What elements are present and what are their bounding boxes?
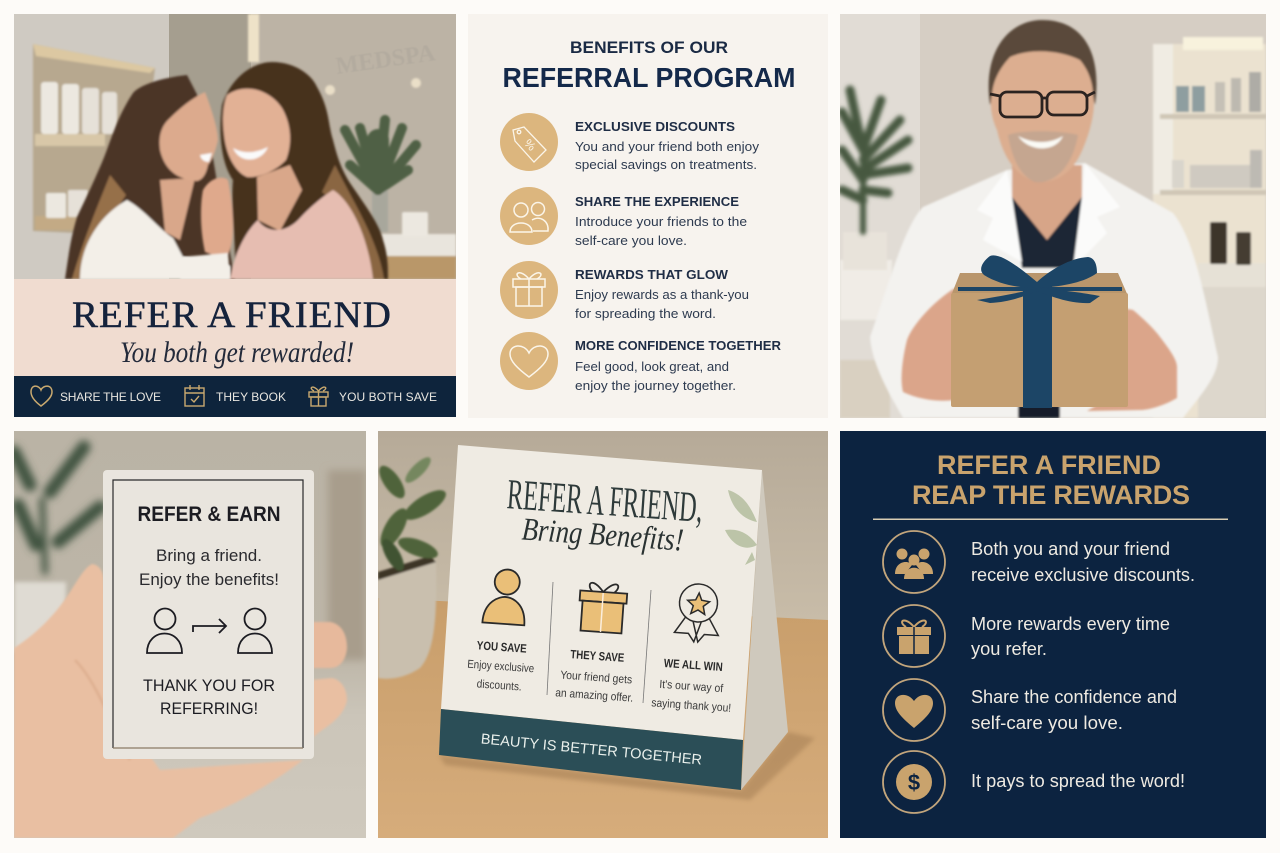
card subtext: Bring a friend.: [156, 547, 262, 565]
label: share the love: SHARE THE LOVE: [60, 390, 161, 404]
tagline: you both get rewarded: You both get rewarded!: [120, 336, 354, 369]
panel: doctor holding gift box photo: [840, 14, 1266, 418]
inner border: [113, 480, 303, 748]
benefit: more confidence together: [500, 332, 782, 393]
benefit: share the experience: self-care you love.: [575, 233, 687, 248]
benefit row: share confidence: [883, 679, 1177, 741]
divider: [547, 582, 553, 695]
icon: two people: [500, 187, 558, 245]
benefit row: share confidence: self-care you love.: [971, 713, 1123, 733]
panel: tabletop tent card photo: [375, 431, 828, 838]
face: [991, 51, 1094, 182]
benefit row: spread the word: [883, 751, 1185, 813]
column: they save: [555, 647, 634, 705]
label: they book: THEY BOOK: [216, 390, 286, 404]
glasses: [990, 92, 1095, 117]
heading: refer a friend: REFER A FRIEND: [72, 294, 392, 335]
column: we all win: It's our way of: [659, 679, 724, 695]
photo: two women smiling in medspa: [14, 14, 456, 279]
benefit: rewards that glow: [500, 261, 749, 321]
benefit: share the experience: [500, 187, 747, 248]
table: [378, 598, 828, 838]
icon: gift box: [578, 582, 628, 634]
benefit: share the experience: SHARE THE EXPERIENCE: [575, 194, 739, 209]
benefit: share the experience: Introduce your friends to the: [575, 214, 747, 229]
lapels: [977, 170, 1022, 262]
panel: benefits of our referral program: [468, 14, 828, 418]
scrubs: [1012, 197, 1082, 268]
icon: heart: [31, 386, 52, 406]
icon: gift: [500, 261, 558, 319]
label: you both save: YOU BOTH SAVE: [339, 390, 437, 404]
plant pot: [375, 454, 450, 679]
icon: award ribbon: [674, 583, 722, 643]
tent card front: [439, 445, 762, 790]
icon: person: [482, 568, 528, 625]
icon: price tag: [500, 113, 558, 171]
bow: [977, 255, 1100, 303]
icon: person arrow person: [147, 608, 272, 653]
heading line one: REFER A FRIEND: [937, 450, 1161, 480]
benefit row: discounts: receive exclusive discounts.: [971, 565, 1195, 585]
benefit: rewards that glow: for spreading the word.: [575, 306, 716, 321]
icon: group: [883, 531, 945, 593]
gift box: [951, 255, 1128, 408]
heading line two: REAP THE REWARDS: [912, 480, 1190, 510]
benefit: rewards that glow: Enjoy rewards as a thank-you: [575, 287, 749, 302]
tent card side flap: [741, 470, 788, 790]
heading: benefits of our: BENEFITS OF OUR: [570, 39, 728, 57]
column: they save: Your friend gets: [560, 670, 633, 687]
card shadow: [439, 732, 815, 800]
leaf decoration: [725, 490, 757, 565]
column: we all win: [651, 656, 732, 715]
teal band: [439, 709, 743, 790]
divider: [643, 590, 651, 703]
gold rule: [873, 518, 1228, 520]
benefit: more confidence together: Feel good, look great, and: [575, 359, 729, 374]
icon: calendar: [185, 385, 204, 406]
card heading: REFER & EARN: [138, 503, 280, 526]
benefit: rewards that glow: REWARDS THAT GLOW: [575, 267, 729, 282]
heading: referral program: REFERRAL PROGRAM: [502, 62, 796, 93]
column: you save: discounts.: [476, 678, 522, 694]
column: you save: YOU SAVE: [476, 638, 527, 656]
icon: gift: [309, 387, 328, 406]
column: we all win: saying thank you!: [651, 697, 732, 715]
sign: medspa wall lettering: MEDSPA: [334, 40, 438, 80]
column: they save: THEY SAVE: [570, 647, 625, 665]
benefit: more confidence together: enjoy the journey together.: [575, 378, 736, 393]
benefit row: more rewards: [883, 605, 1170, 667]
hands: [902, 288, 1177, 411]
white coat: [870, 163, 1218, 418]
benefit row: more rewards: you refer.: [971, 639, 1047, 659]
benefit row: discounts: [883, 531, 1195, 593]
icon: dollar coin: $: [908, 770, 920, 795]
card heading: REFER A FRIEND,: [506, 471, 704, 532]
shelves background: [840, 37, 1266, 418]
right woman: [180, 62, 388, 279]
referral card: REFERRING!: [160, 699, 258, 718]
referral card: Enjoy the benefits!: [139, 571, 279, 589]
referral card: [103, 470, 314, 759]
icon: heart: [883, 679, 945, 741]
panel: refer a friend reap the rewards: [840, 431, 1266, 838]
benefit row: spread the word: It pays to spread the word!: [971, 771, 1185, 791]
card thanks: THANK YOU FOR: [143, 676, 275, 695]
benefit row: share confidence: Share the confidence and: [971, 687, 1177, 707]
benefit row: discounts: Both you and your friend: [971, 539, 1170, 559]
footer: three step bar: [14, 376, 456, 417]
benefit: exclusive discounts: You and your friend both enjoy: [575, 139, 760, 154]
hand: [14, 564, 347, 838]
icon: heart: [500, 332, 558, 390]
panel: refer a friend poster: [14, 14, 456, 417]
plant and pot: [14, 447, 366, 660]
column: you save: Enjoy exclusive: [467, 659, 535, 675]
hair: [989, 20, 1097, 105]
doctor: [870, 20, 1218, 418]
card script line: Bring Benefits!: [521, 510, 685, 558]
icon: gift: [883, 605, 945, 667]
banner: pink title area: [14, 279, 456, 376]
band tagline: BEAUTY IS BETTER TOGETHER: [480, 731, 703, 769]
icon: price tag: %: [521, 136, 539, 154]
benefit: exclusive discounts: EXCLUSIVE DISCOUNTS: [575, 119, 735, 134]
column: you save: [468, 641, 534, 690]
plant: [842, 90, 908, 232]
left woman: [65, 75, 235, 279]
benefit row: more rewards: More rewards every time: [971, 614, 1170, 634]
benefit: exclusive discounts: special savings on treatments.: [575, 157, 757, 172]
panel: hand holding referral card: [14, 431, 366, 838]
icon: dollar coin: [883, 751, 945, 813]
benefit: more confidence together: MORE CONFIDENCE TOGETHER: [575, 338, 782, 353]
column: we all win: WE ALL WIN: [663, 656, 723, 674]
column: they save: an amazing offer.: [555, 687, 634, 705]
benefit: exclusive discounts: [500, 113, 760, 172]
neck: [1012, 165, 1082, 240]
